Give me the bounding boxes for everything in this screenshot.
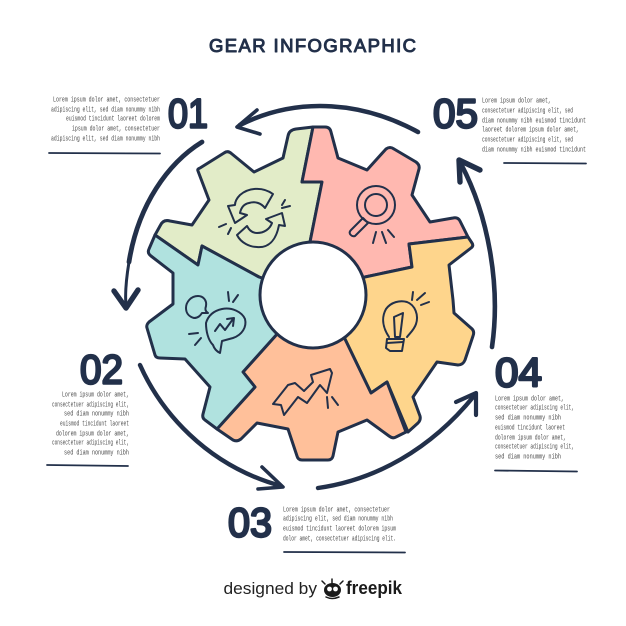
text block 04: consectetuer adipiscing elit, [495,444,574,452]
number 01: 01 [168,90,208,136]
gear segment: green [155,127,322,295]
gear segment: pink [302,127,468,295]
underline 03 [284,551,405,554]
number 04: 04 [495,350,542,396]
text block 02: Lorem ipsum dolor amet, [62,392,129,400]
icon: recycle arrows [219,189,290,247]
text block 04: sed diam nonummy nibh [495,454,561,462]
text block 03: adipiscing elit, sed diam nonummy nibh [283,516,393,524]
freepik wordmark: freepik [346,578,403,598]
text block 05 [482,98,586,154]
text block 01: euismod tincidunt laoreet dolorem [66,116,160,124]
arrow: 02 to 03 [140,365,283,489]
text block 02: dolorem ipsum dolor amet, [56,430,129,438]
text block 04: consectetuer adipiscing elit, [495,404,574,412]
gear [147,127,474,460]
text block 03 [283,506,396,544]
gear segment: yellow [313,237,474,432]
text block 01: adipiscing elit, sed diam nonummy nibh [51,136,160,144]
text block 04: dolorem ipsum dolor amet, [495,434,566,442]
text block 01: Lorem ipsum dolor amet, consectetuer [53,96,160,104]
text block 03: euismod tincidunt laoreet dolorem ipsum [283,526,396,534]
number 03: 03 [228,500,272,546]
text block 05: Lorem ipsum dolor amet, [482,98,551,106]
text block 02: sed diam nonummy nibh [64,410,129,418]
icon: freepik logo [322,579,343,598]
text block 05: consectetuer adipiscing elit, sed [482,108,573,116]
text block 03: dolor amet, consectetuer adipiscing elit. [283,536,396,544]
underline 02 [47,465,128,466]
icon: chat bubbles [186,292,245,353]
gear segment: teal [147,235,313,429]
text block 05: laoreet dolorem ipsum dolor amet, [482,126,579,134]
text block 05: consectetuer adipiscing elit, sed [482,136,573,144]
designed by text: designed by [224,579,318,598]
text block 04: euismod tincidunt laoreet [495,424,565,432]
icon: magnifier [350,186,395,243]
number 05: 05 [433,90,478,136]
gear centre hole [260,242,366,348]
text block 03: Lorem ipsum dolor amet, consectetuer [283,506,390,514]
arrow: 03 to 04 [318,393,476,488]
footer credit [224,578,403,598]
arrow: 04 to 05 [459,160,495,347]
text block 01: ipsum dolor amet, consectetuer [72,126,160,134]
title: GEAR INFOGRAPHIC [209,35,416,56]
underline 01 [49,152,160,154]
underline 04 [495,470,577,472]
text block 01 [51,96,160,144]
arrow: 01 to 02 [114,142,202,308]
text block 02: sed diam nonummy nibh [64,450,129,458]
text block 04: sed diam nonummy nibh [495,414,561,422]
number 02: 02 [80,346,123,392]
text block 01: adipiscing elit, sed diam nonummy nibh [51,106,160,114]
text block 02: consectetuer adipiscing elit, [52,402,129,410]
gear segment: orange [217,295,406,460]
text block 04 [495,396,574,462]
text block 02 [52,392,129,458]
arrow: 05 to 01 [237,106,418,134]
text block 02: consectetuer adipiscing elit, [52,440,129,448]
icon: growth arrow [273,369,338,415]
text block 02: euismod tincidunt laoreet [60,420,129,428]
text block 04: Lorem ipsum dolor amet, [495,396,564,404]
underline 05 [504,162,586,164]
icon: light bulb [383,292,429,351]
